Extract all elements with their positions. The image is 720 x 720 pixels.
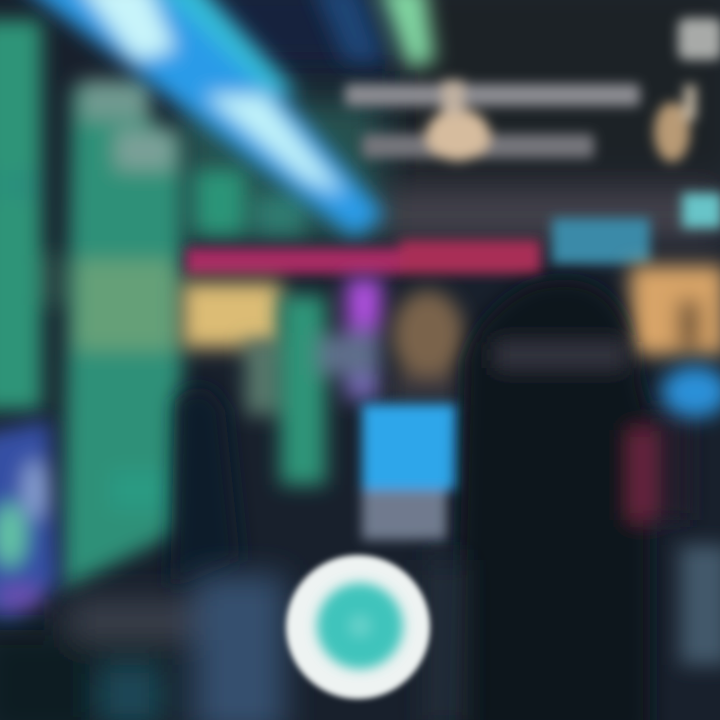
figure: brown person head (390, 290, 464, 405)
panel: left green data wall (0, 20, 305, 590)
panel: yellow and orange windows (182, 265, 720, 355)
icon: top right bottle shapes (654, 18, 720, 162)
icon: teal circle button (286, 555, 430, 699)
panel: right blue accent (661, 366, 720, 665)
panel: bright blue screen (362, 404, 458, 540)
top accents: green and blue strips (312, 0, 435, 68)
blurred sign text block (345, 80, 640, 161)
panel: lower left blue screen (0, 420, 58, 625)
panel: bottom foreground (0, 560, 460, 720)
panel: center green column and purple (245, 278, 382, 485)
panel: upper dark ceiling (170, 0, 720, 240)
panel: teal sign and right blue (552, 193, 720, 264)
figure: dark silhouettes (170, 280, 690, 720)
panel: magenta banner (186, 240, 541, 274)
light streak: diagonal blue beam (15, 0, 385, 238)
